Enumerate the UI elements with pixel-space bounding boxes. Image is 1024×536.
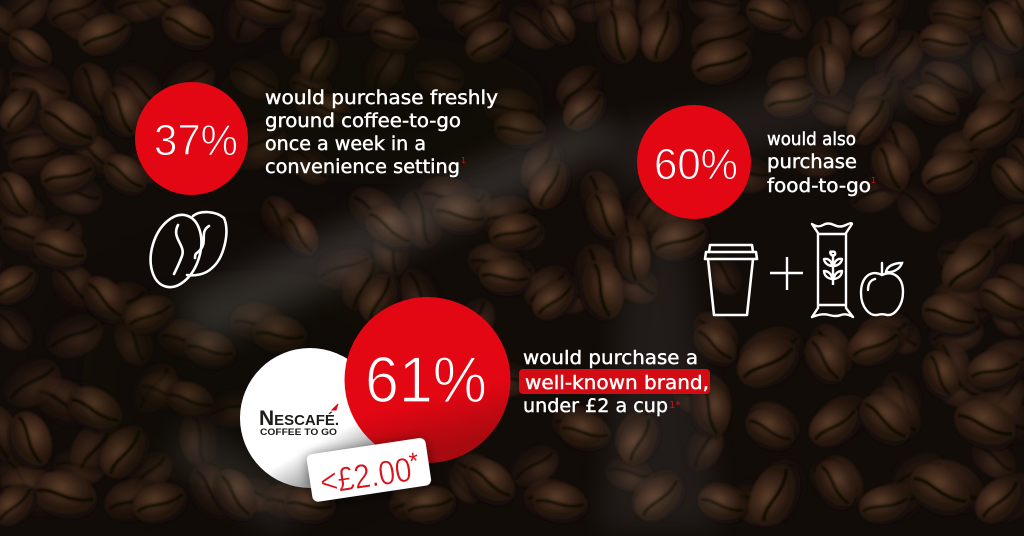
stat 37%: freshly ground coffee: [135, 82, 498, 293]
icon: apple: [861, 263, 903, 315]
red circle: 60%: 60%: [654, 140, 738, 189]
price tag: under £2.00: [306, 437, 432, 503]
text: food-to-go description: would also: [767, 130, 856, 150]
price tag: under £2.00: *: [407, 448, 421, 476]
stat 60%: food-to-go: [637, 105, 903, 317]
text: freshly ground coffee description: ground coffee-to-go: [265, 111, 461, 132]
text: food-to-go description: purchase: [767, 152, 857, 173]
red circle: 61%: [344, 297, 510, 463]
text: food-to-go description: food-to-go: [767, 176, 871, 197]
text: food-to-go description: [767, 130, 876, 197]
red circle: 60%: [637, 105, 751, 219]
price tag: under £2.00: <£2.00: [318, 451, 414, 502]
text: well-known brand description: [519, 347, 710, 417]
text: food-to-go description: 1: [871, 176, 876, 185]
white circle: Nescafé logo: NESCAFÉ.: [259, 407, 339, 430]
text: freshly ground coffee description: convenience setting: [265, 157, 460, 178]
white circle: Nescafé logo: COFFEE TO GO: [260, 427, 337, 438]
text: freshly ground coffee description: once a week in a: [265, 134, 426, 155]
red circle: 37%: 37%: [154, 116, 238, 165]
text: freshly ground coffee description: would purchase freshly: [265, 88, 498, 109]
icon: cereal bar: [812, 223, 853, 317]
icon: takeaway cup: [705, 245, 757, 315]
text: well-known brand description: under £2 a cup: [523, 395, 668, 417]
red circle: 61%: 61%: [365, 343, 487, 416]
text: freshly ground coffee description: [265, 88, 498, 178]
icon: plus sign: [770, 257, 803, 290]
white circle: Nescafé logo: [240, 348, 380, 488]
text: freshly ground coffee description: 1: [461, 156, 466, 165]
text: well-known brand description: would purchase a: [523, 347, 698, 369]
stat 61%: well-known brand: [240, 297, 710, 503]
icon: coffee bean: [142, 209, 226, 293]
red circle: 37%: [135, 82, 248, 195]
text: well-known brand description: 1*: [669, 400, 680, 411]
text: well-known brand description: well-known brand,: [525, 372, 709, 394]
